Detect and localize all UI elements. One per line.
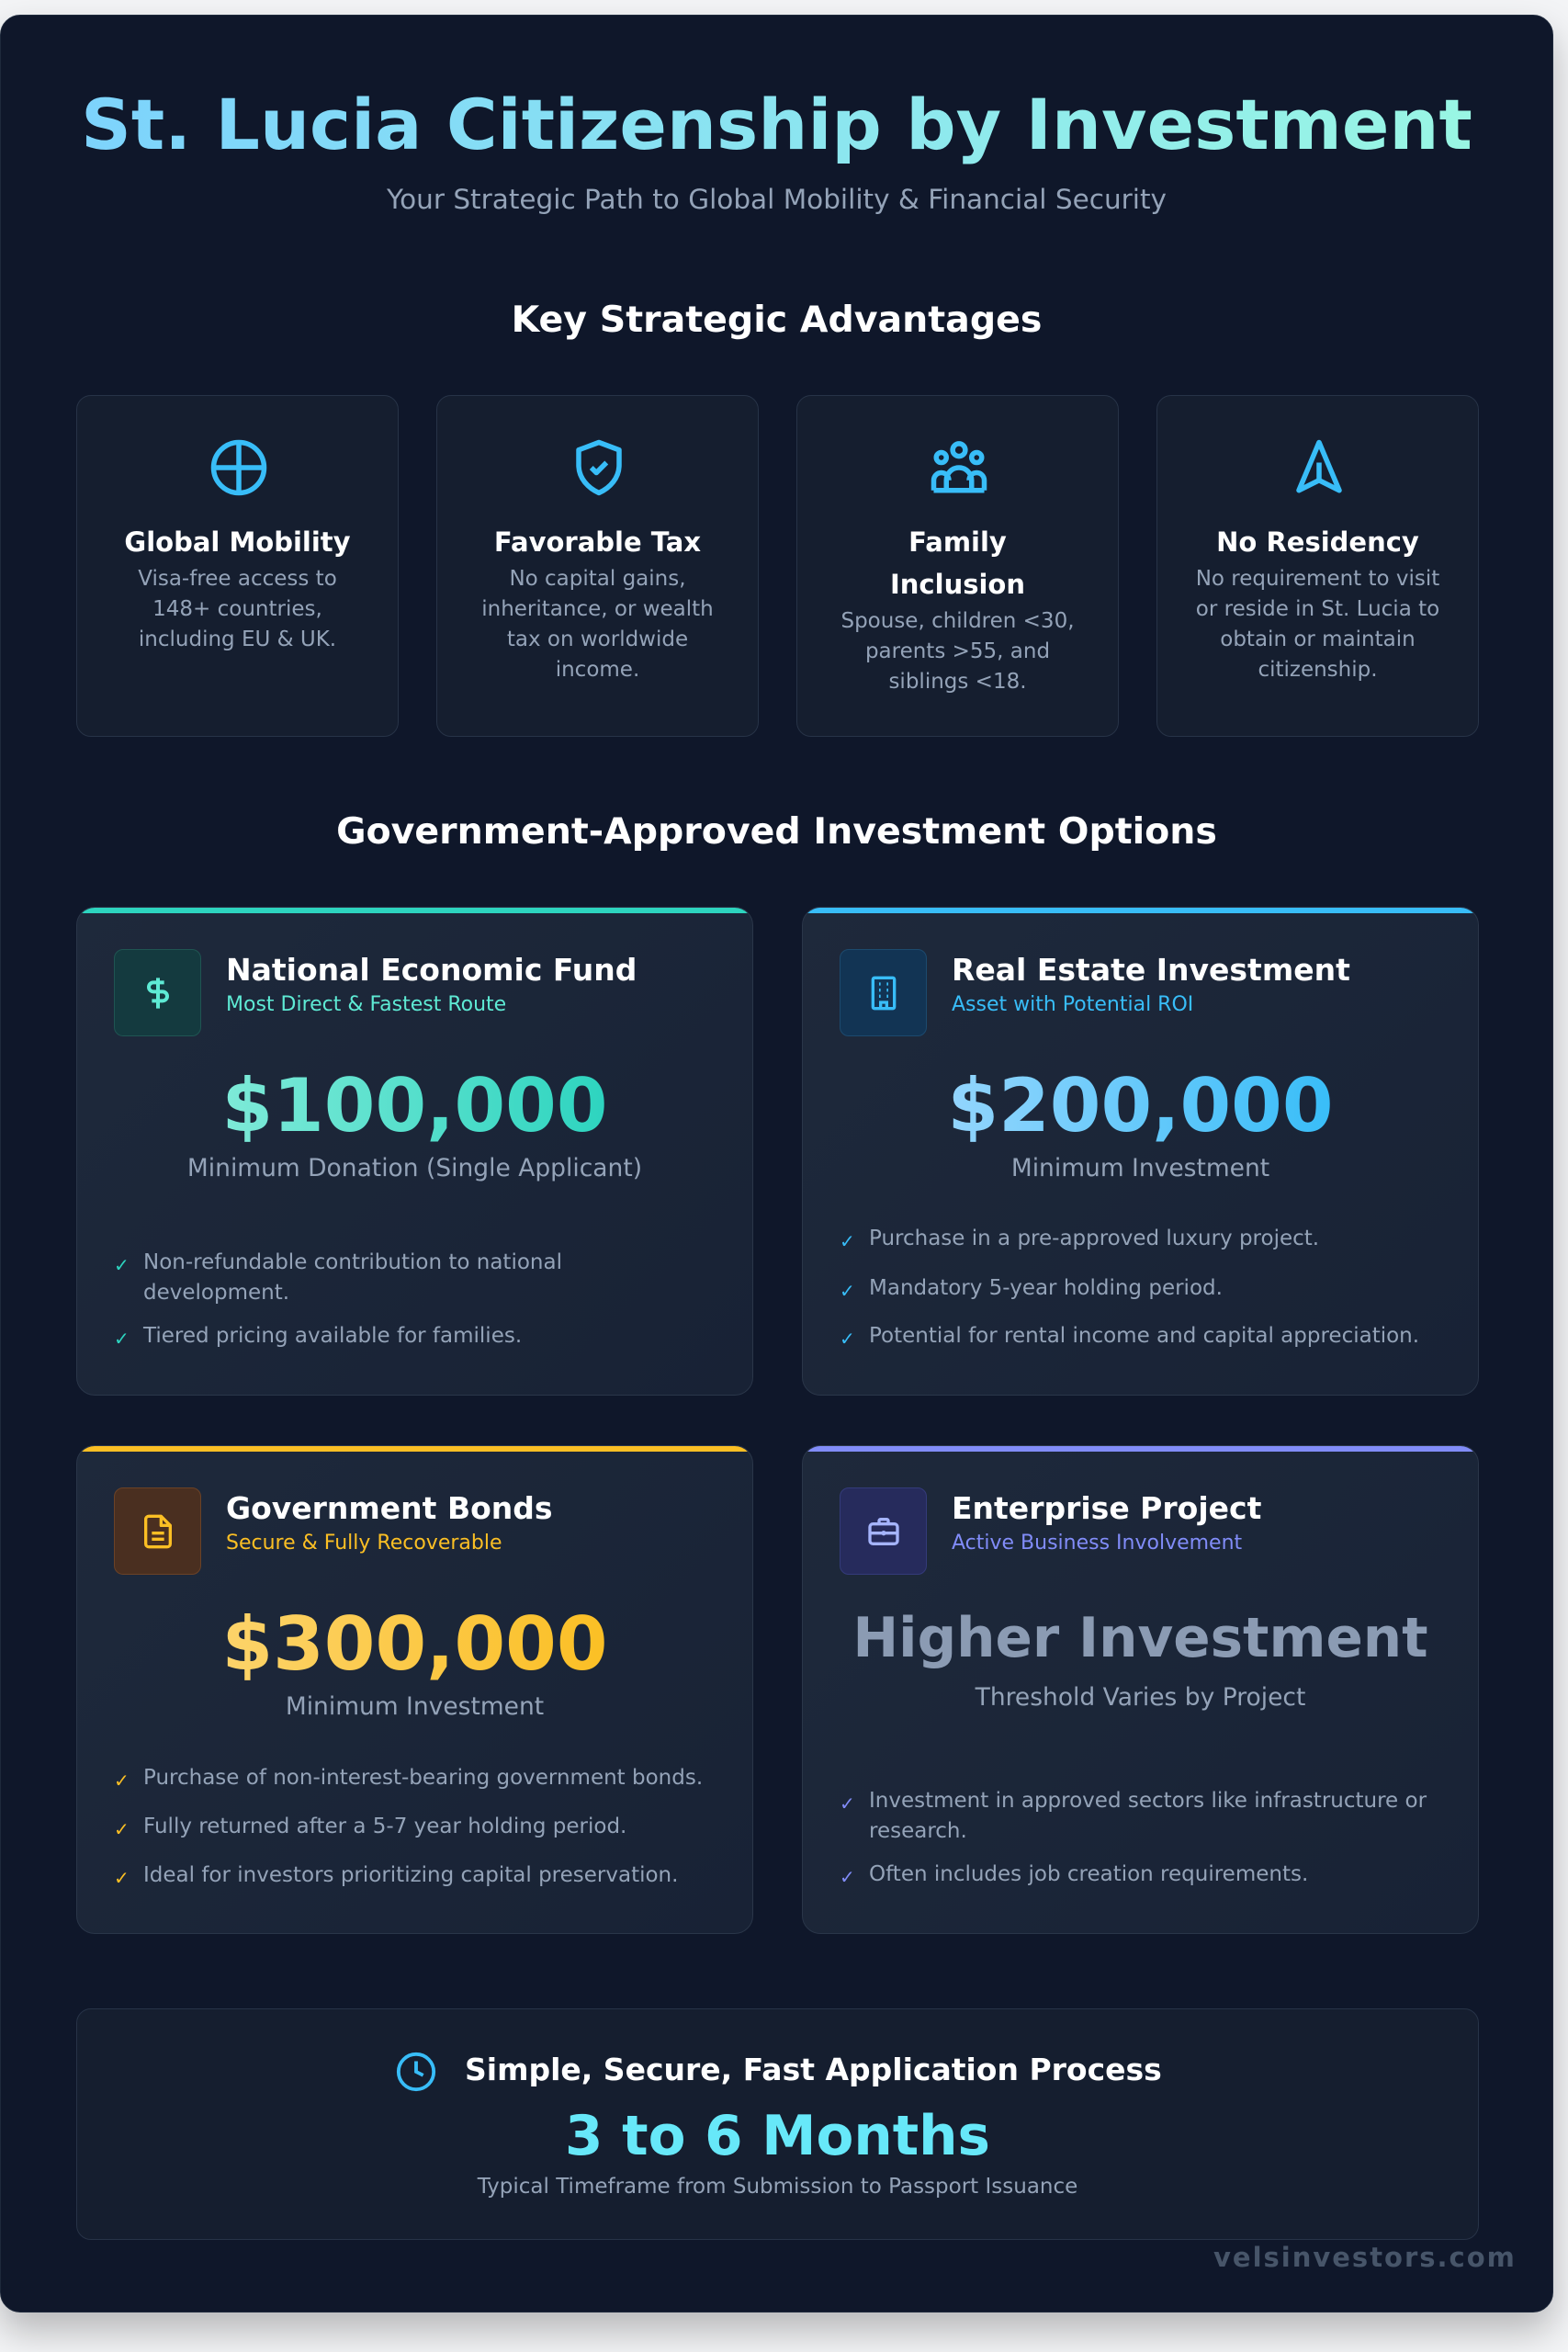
benefits list: Purchase in a pre-approved luxury project. — [869, 1227, 1319, 1250]
timeframe: 3 to 6 Months — [565, 2105, 990, 2168]
panel: national economic fund: Most Direct & Fastest Route — [226, 993, 506, 1016]
price: Higher Investment — [852, 1607, 1428, 1670]
title: St. Lucia Citizenship by Investment — [81, 84, 1472, 165]
panel: enterprise project — [802, 1445, 1479, 1934]
panel: favorable tax: No capital gains, inheritance, or wealth tax on worldwide income. — [481, 567, 714, 682]
panel: real estate: ✓ — [840, 1280, 855, 1302]
panel: family inclusion: Family — [908, 526, 1007, 558]
icon: family — [931, 441, 987, 492]
panel: favorable tax — [436, 395, 759, 737]
panel: government bonds: ✓ — [114, 1867, 130, 1889]
panel: real estate: Mandatory 5-year holding period. — [869, 1276, 1223, 1300]
panel: global mobility: Visa-free access to 148+ countries, including EU & UK. — [138, 567, 337, 651]
panel: government bonds: ✓ — [114, 1818, 130, 1840]
panel: national economic fund: Minimum Donation (Single Applicant) — [187, 1154, 642, 1182]
icon: building — [840, 949, 927, 1036]
icon: shield — [576, 439, 622, 496]
panel: national economic fund: National Economic Fund — [226, 952, 637, 988]
panel: no residency — [1156, 395, 1479, 737]
panel: enterprise project: Threshold Varies by Project — [976, 1683, 1305, 1712]
benefits list: research. — [869, 1819, 967, 1843]
icon: navigation — [1296, 439, 1342, 492]
panel: real estate: Potential for rental income and capital appreciation. — [869, 1324, 1419, 1348]
panel: government bonds — [76, 1445, 753, 1934]
benefits list: development. — [143, 1281, 289, 1305]
benefits list: ✓ — [840, 1792, 855, 1815]
panel: favorable tax: Favorable Tax — [494, 526, 701, 558]
benefits list: Purchase of non-interest-bearing government bonds. — [143, 1766, 703, 1790]
benefits list: ✓ — [114, 1254, 130, 1276]
icon: briefcase — [840, 1487, 927, 1575]
benefits list: ✓ — [840, 1230, 855, 1252]
panel: real estate: ✓ — [840, 1328, 855, 1350]
panel: government bonds: Secure & Fully Recoverable — [226, 1532, 502, 1555]
benefits list — [114, 1250, 562, 1305]
panel: global mobility: Global Mobility — [124, 526, 351, 558]
benefits list: ✓ — [114, 1770, 130, 1792]
panel: government bonds: Minimum Investment — [286, 1692, 544, 1721]
panel: national economic fund: Tiered pricing available for families. — [143, 1324, 522, 1348]
panel: no residency: No requirement to visit or reside in St. Lucia to obtain or maintain citizenship. — [1196, 567, 1439, 682]
panel: real estate: Real Estate Investment — [952, 952, 1350, 988]
panel: real estate — [802, 907, 1479, 1396]
panel: real estate: Minimum Investment — [1011, 1154, 1269, 1182]
panel: enterprise project: ✓ — [840, 1866, 855, 1888]
heading: options: Government-Approved Investment Options — [336, 810, 1217, 853]
panel: government bonds: Fully returned after a 5-7 year holding period. — [143, 1815, 626, 1838]
heading: advantages: Key Strategic Advantages — [512, 299, 1042, 341]
panel: no residency: No Residency — [1216, 526, 1419, 558]
panel: application process — [76, 2008, 1479, 2240]
panel: global mobility — [76, 395, 399, 737]
price: $300,000 — [221, 1601, 608, 1687]
panel: application process: Typical Timeframe from Submission to Passport Issuance — [478, 2175, 1077, 2199]
benefits list — [840, 1789, 1427, 1843]
subtitle: Your Strategic Path to Global Mobility & Financial Security — [387, 184, 1167, 215]
icon: clock — [397, 2052, 435, 2091]
panel: family inclusion: Spouse, children <30, parents >55, and siblings <18. — [840, 609, 1075, 694]
panel: government bonds: Government Bonds — [226, 1490, 553, 1526]
benefits list: Non-refundable contribution to national — [143, 1250, 562, 1274]
panel: family inclusion — [796, 395, 1119, 737]
icon: document — [114, 1487, 201, 1575]
price: $100,000 — [221, 1063, 608, 1148]
price: $200,000 — [947, 1063, 1334, 1148]
watermark: velsinvestors.com — [1213, 2242, 1517, 2273]
benefits list: Investment in approved sectors like infrastructure or — [869, 1789, 1427, 1813]
panel: national economic fund: ✓ — [114, 1328, 130, 1350]
panel: real estate: Asset with Potential ROI — [952, 993, 1193, 1016]
panel: government bonds: Ideal for investors prioritizing capital preservation. — [143, 1863, 678, 1887]
process heading: Simple, Secure, Fast Application Process — [465, 2052, 1162, 2087]
icon: fund — [114, 949, 201, 1036]
panel: family inclusion: Inclusion — [890, 569, 1025, 600]
panel: national economic fund — [76, 907, 753, 1396]
panel: enterprise project: Often includes job creation requirements. — [869, 1862, 1308, 1886]
panel: enterprise project: Enterprise Project — [952, 1490, 1261, 1526]
panel: enterprise project: Active Business Involvement — [952, 1532, 1242, 1555]
icon: globe — [211, 439, 266, 496]
